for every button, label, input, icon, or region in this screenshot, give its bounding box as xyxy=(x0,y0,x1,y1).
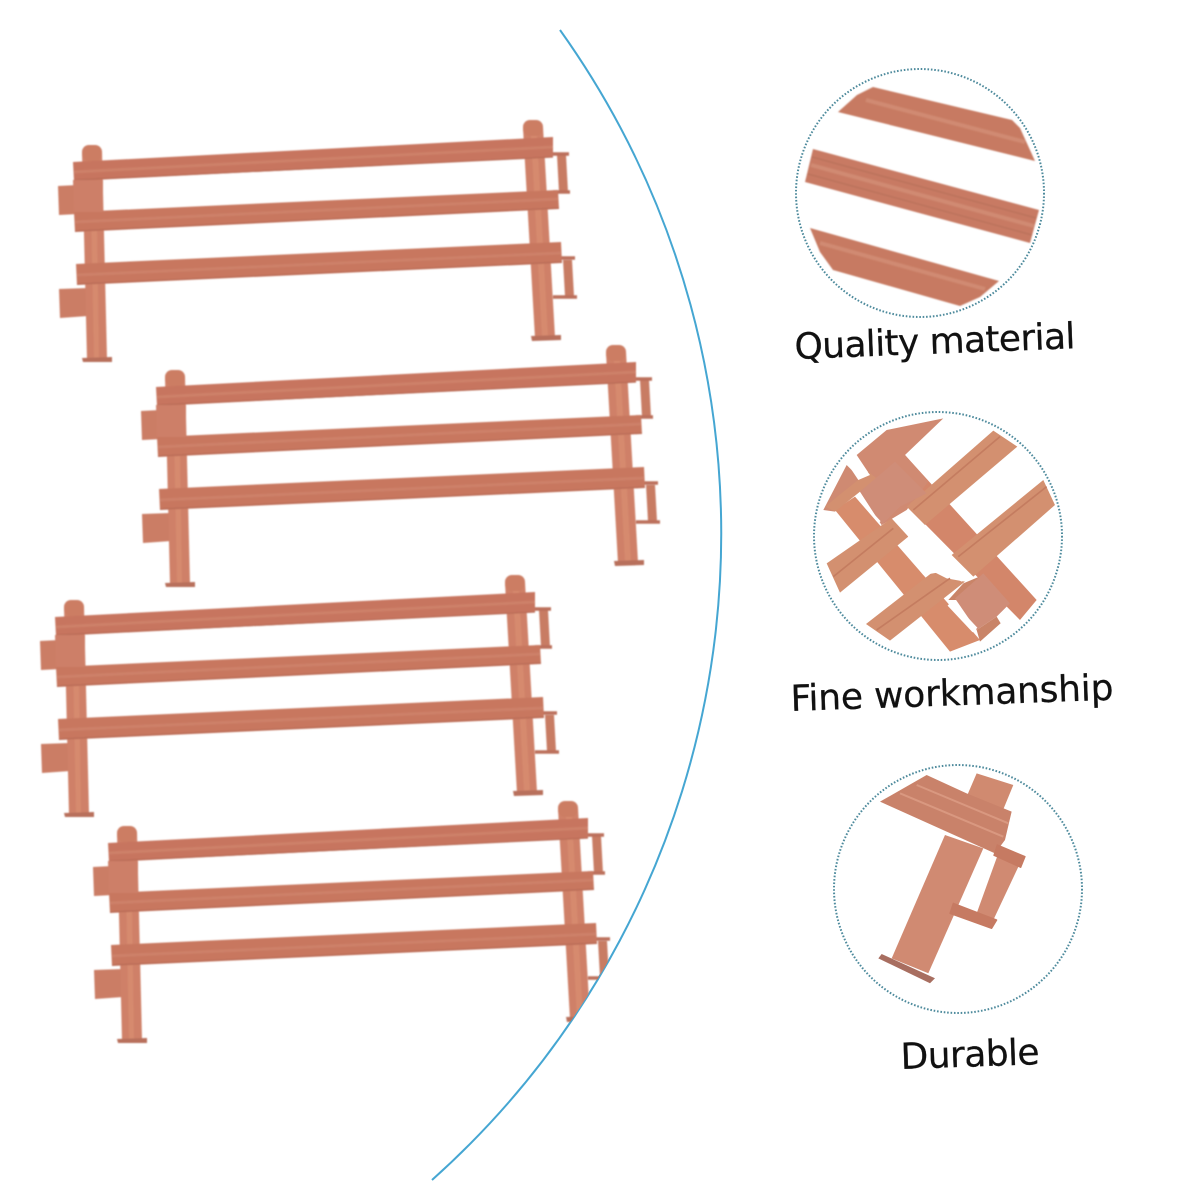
dotted circle xyxy=(796,69,1044,317)
fence 4, clipped by arc xyxy=(93,801,612,1043)
fence 2 xyxy=(141,345,660,587)
label: Durable xyxy=(900,1032,1040,1078)
panel: quality material xyxy=(794,69,1076,368)
panel: fine workmanship xyxy=(790,412,1114,720)
label: Fine workmanship xyxy=(790,668,1114,720)
icon: rail stripes close-up xyxy=(805,87,1039,306)
icon: joints close-up xyxy=(823,418,1055,652)
label: Quality material xyxy=(794,316,1076,368)
dotted circle xyxy=(814,412,1062,660)
icon: post and clip close-up xyxy=(878,773,1025,983)
panel: durable xyxy=(834,765,1082,1078)
curved divider arc xyxy=(432,30,721,1180)
fence 1 xyxy=(58,120,577,362)
dotted circle xyxy=(834,765,1082,1013)
fence 3 xyxy=(40,575,559,817)
